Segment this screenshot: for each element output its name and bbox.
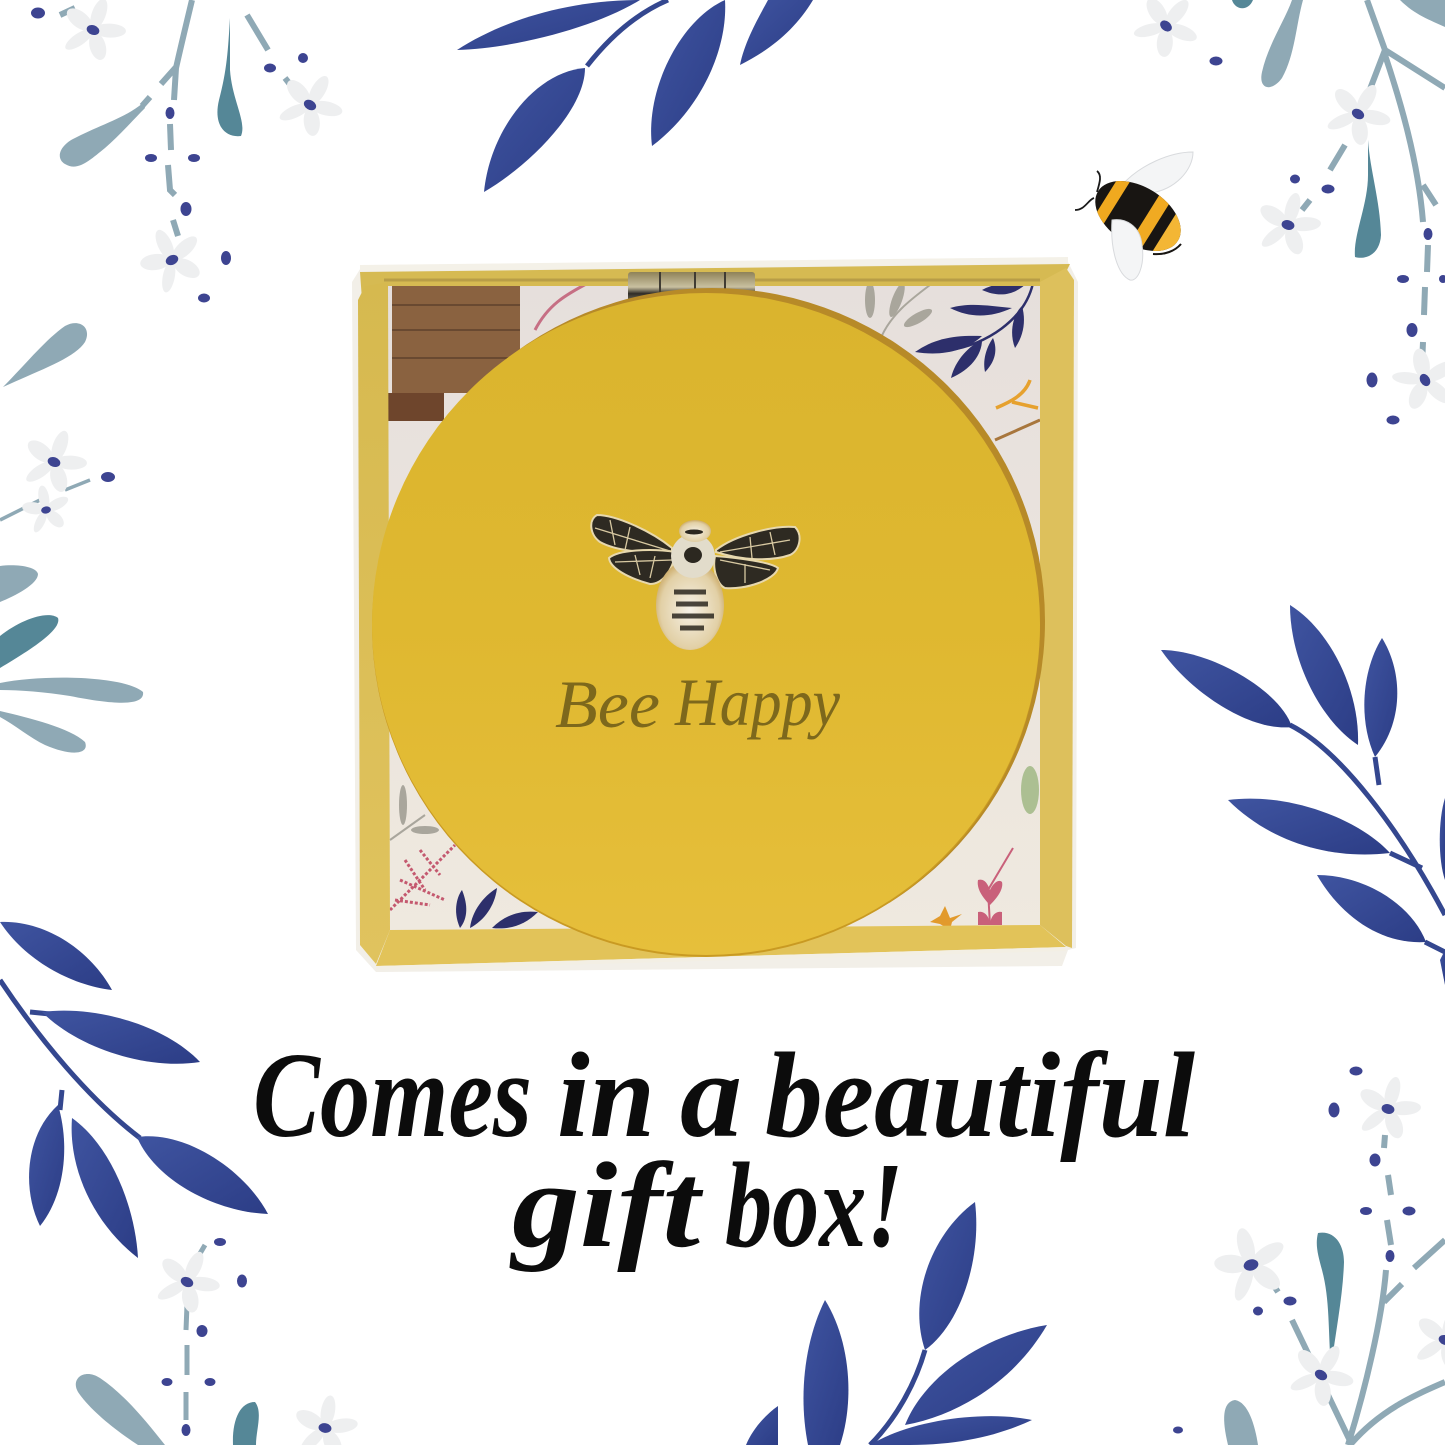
headline: a bbox=[680, 1028, 742, 1163]
blue leaves: bottom centre bbox=[746, 1202, 1047, 1445]
hinge bbox=[628, 272, 755, 302]
fan leaves bbox=[0, 565, 143, 753]
upper wing bbox=[1122, 152, 1193, 195]
buds bbox=[1210, 56, 1445, 424]
flowers bbox=[1121, 0, 1445, 424]
grey fern print bbox=[390, 785, 439, 840]
body bbox=[1095, 181, 1181, 251]
leaf bbox=[3, 323, 87, 387]
navy leaf print bbox=[915, 282, 1033, 378]
engraved lid text bbox=[555, 664, 841, 742]
headline line 1: Comes bbox=[253, 1028, 532, 1163]
abdomen bbox=[656, 560, 724, 650]
gold bee charm bbox=[591, 515, 800, 650]
bud bbox=[101, 472, 115, 482]
teal leaf bbox=[233, 1402, 259, 1445]
lower wing bbox=[1112, 220, 1143, 280]
bottom flap bbox=[376, 925, 1066, 966]
flowers bbox=[1205, 1069, 1445, 1418]
compact shell rim bbox=[379, 288, 1045, 954]
wing veins bbox=[595, 520, 790, 583]
branch print bbox=[995, 420, 1040, 440]
flowers bbox=[13, 420, 97, 537]
flowers bbox=[144, 1238, 364, 1445]
headline: in bbox=[557, 1028, 655, 1163]
headline line 2: gift bbox=[509, 1138, 703, 1273]
teal sprig: bottom right bbox=[1173, 1066, 1445, 1445]
wings bbox=[591, 515, 800, 588]
abdomen stripes bbox=[672, 592, 714, 628]
teal sprig: top left bbox=[31, 0, 356, 302]
flowers bbox=[52, 0, 356, 301]
gift box bbox=[352, 260, 1078, 972]
top flap bbox=[360, 264, 1070, 300]
wooden hive print bbox=[384, 283, 520, 421]
teal sprig: left edge bbox=[0, 323, 143, 753]
buds bbox=[162, 1238, 247, 1436]
pink fern print bbox=[390, 845, 455, 910]
pink sprig print bbox=[535, 282, 590, 330]
buds bbox=[1173, 1066, 1416, 1434]
leaf bbox=[1224, 1400, 1258, 1445]
leaf bbox=[76, 1374, 165, 1445]
illustrated bumblebee bbox=[1075, 152, 1194, 280]
stem bbox=[0, 480, 90, 520]
teal leaf bbox=[1317, 1233, 1344, 1368]
leaf bbox=[60, 103, 145, 167]
blue leaves: top centre bbox=[457, 0, 813, 192]
thorax bbox=[671, 534, 715, 578]
blue leaves: bottom-left branch bbox=[0, 922, 268, 1258]
inner printed panel bbox=[384, 280, 1042, 932]
blue leaves: right branch bbox=[1161, 605, 1445, 985]
grey leaf print bbox=[865, 281, 934, 340]
teal leaf bbox=[217, 18, 242, 136]
headline: box! bbox=[725, 1138, 903, 1273]
teal sprig: top right bbox=[1121, 0, 1445, 424]
headline bbox=[253, 1028, 1195, 1273]
antennae bbox=[1075, 171, 1100, 210]
flower and heart print bbox=[930, 848, 1013, 930]
left wall bbox=[358, 282, 390, 964]
buds bbox=[31, 8, 308, 302]
navy leaf print lower bbox=[456, 888, 538, 928]
right wall bbox=[1040, 268, 1074, 948]
teal sprig: bottom left bbox=[76, 1238, 364, 1445]
compact lid bbox=[372, 295, 1040, 957]
outer printed edge bbox=[352, 262, 1078, 972]
teal leaf bbox=[1355, 140, 1381, 258]
green print bbox=[1021, 766, 1039, 814]
engraved lid text: Happy bbox=[674, 664, 841, 740]
tail shadow bbox=[1153, 244, 1181, 254]
leaves bbox=[1261, 0, 1303, 87]
orange sprig print bbox=[996, 380, 1038, 408]
engraved lid text: Bee bbox=[555, 666, 660, 742]
headline: beautiful bbox=[765, 1028, 1195, 1163]
head bbox=[679, 520, 711, 542]
